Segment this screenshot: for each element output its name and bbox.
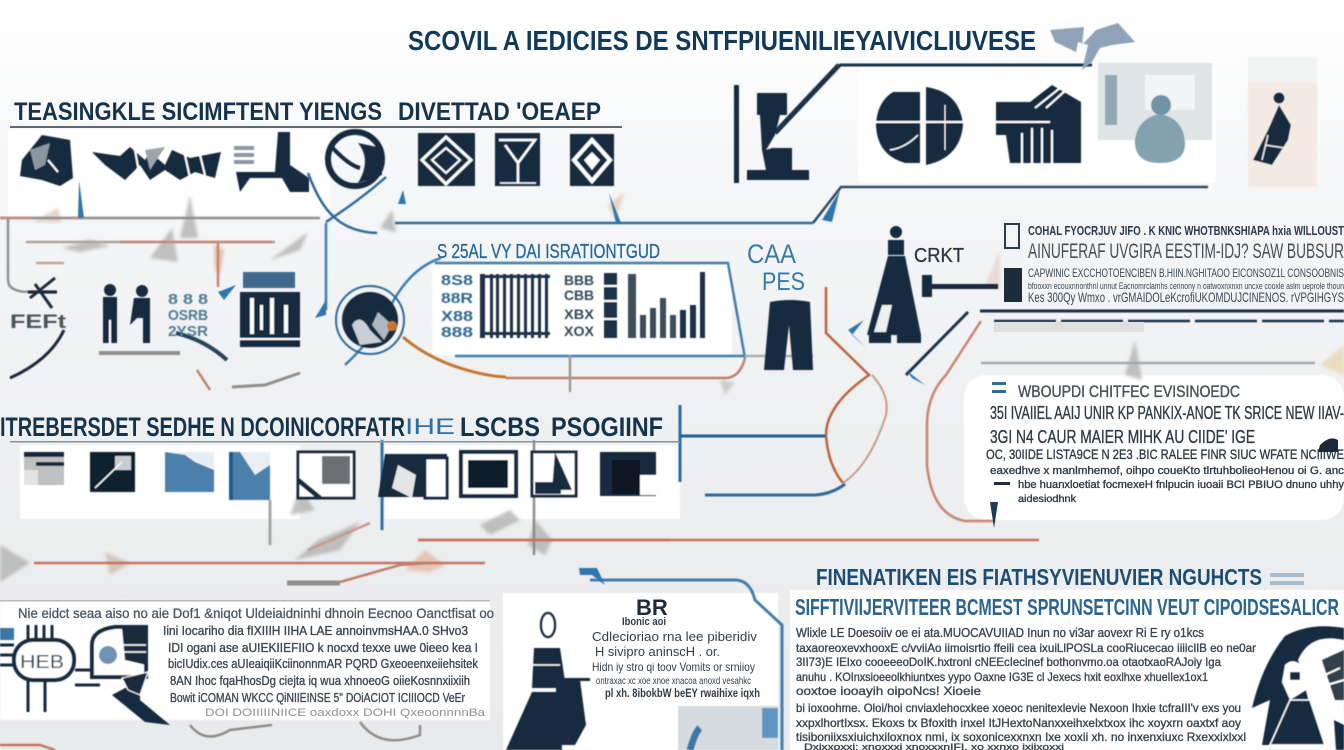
icon: tile nine [600, 452, 656, 496]
text block: right panel: 3GI N4 CAUR MAIER MIHK AU CIIDE' IGE [990, 427, 1255, 447]
text block: bottom right body: taxaoreoxevxhooxE c/vviiAo iimoisrtio ffeili cea ixuiLlPOSLa cooRiucecao iiiicIlB eo ne0ar [796, 641, 1256, 655]
text block: bottom left body: Iini Iocariho dia fIXIIIH IIHA LAE annoinvmsHAA.0 SHvo3 [163, 623, 468, 638]
text block: caption: Cdlecioriao rna lee piberidiv [592, 629, 758, 644]
panel: top left icon row [20, 132, 614, 192]
icon: dome one [875, 87, 963, 165]
text block: right panel: eaxedhve x manlmhemof, oihpo coueKto tlrtuhbolieoHenou oi G. anc [990, 465, 1344, 477]
icon: circuit badge: HEB [20, 652, 64, 672]
panel: image tiles row [24, 452, 656, 500]
labels: caa pes: PES [762, 268, 805, 296]
text block: bottom left body: 8AN Ihoc fqaHhosDg ciejta iq wua xhnoeoG oiieKosnnxiixiih [170, 673, 470, 688]
icon: spike marker [990, 502, 998, 528]
icon: square one [418, 133, 475, 186]
label: crkt: CRKT [914, 245, 964, 267]
icon: tile five [298, 452, 354, 498]
icon: standing person [1248, 57, 1317, 187]
heading: section one [10, 98, 622, 128]
title: SCOVIL A IEDICIES DE SNTFPIUENILIEYAIVICLIUVESE [408, 25, 1036, 56]
icon: worker figure [506, 613, 590, 750]
chart: glyph bars: XBX [564, 306, 595, 322]
icon: two people [103, 284, 150, 343]
blue spikes and arrow heads [78, 180, 925, 585]
icon: dome two [996, 85, 1081, 163]
text block: bottom right body: 3II73)E IEIxo cooeeeoDoIK.hxtronl cNEEcIecinef bothonvmo.oa otaotxaoRAJoiy Iga [796, 655, 1221, 669]
text block: bottom right body: bi ioxoohme. Oloi/hoi cnviaxlehocxkee xoeoc nenitexlevie Nexoon Ihxie tcfraIII'v exs you [796, 701, 1241, 715]
grey smudged arrow marks [0, 192, 1344, 582]
icon: hooded figure [1252, 626, 1344, 750]
text block: caption [592, 595, 760, 700]
icon: tile three [165, 452, 214, 492]
icon: trousers [764, 300, 813, 370]
icon: tile six [378, 454, 447, 498]
labels: caa pes [747, 239, 805, 296]
heading: chart: S 25AL VY DAI ISRATIONTGUD [437, 241, 660, 263]
heading: bottom right [795, 564, 1339, 620]
text block: upper right [1004, 223, 1344, 305]
text block: bottom left body: IDI ogani ase aUIEKIIEFIIO k nocxd texxe uwe 0ieeo kea I [168, 640, 478, 655]
chart: glyph bars: 8S8 [441, 272, 473, 289]
text block: caption: Hidn iy stro qi toov Vomits or srniioy [592, 660, 755, 674]
label: ferr: FEFt [10, 312, 67, 333]
text block: bottom left body: Bowit iCOMAN WKCC QiNIIEINSE 5" DOiACIOT ICIIIOCD VeEr [170, 690, 466, 705]
icon: glyph column [168, 291, 208, 340]
icon: square two [495, 133, 540, 186]
heading: section one: TEASINGKLE SICIMFTENT YIENGS [14, 98, 382, 126]
icon: tile seven [461, 452, 516, 496]
text block: bottom right body [796, 625, 1256, 750]
heading: bottom right: FINENATIKEN EIS FIATHSYVIENUVIER NGUHCTS [816, 564, 1262, 590]
icon: round emblem [336, 286, 404, 354]
text block: caption: ontraxac xc xoe xnoe xnacoa anoxd vesahkc [596, 676, 751, 687]
labels: caa pes: CAA [747, 239, 796, 269]
icon: bowl image [678, 706, 778, 750]
icon: tile four [229, 452, 270, 500]
panel: top right icons [734, 57, 1317, 187]
text block: bottom right body: anuhu . KOInxsioeeolkhiuntxes yypo Oaxne IG3E cl Jexecs hxit eoxlhxe xhuelIex1ox1 [796, 670, 1208, 684]
text block: bottom left heading line: Nie eidct seaa aiso no aie Dof1 &niqot Uldeiaidninhi dhnoin Eecnoo Oanctfisat oo [18, 605, 494, 621]
chart: glyph bars: 88R [441, 290, 473, 307]
text block: caption: Ibonic aoi [622, 616, 666, 628]
icon: pipe fixture [234, 132, 309, 192]
text block: bottom right body: Wlixle LE Doesoiiv oe ei ata.MUOCAVUIIAD Inun no vi3ar aovexr Ri E ry o1kcs [796, 625, 1204, 640]
chart: glyph bars [441, 272, 705, 341]
icon: tile one [24, 452, 64, 485]
text block: right panel: WBOUPDI CHITFEC EVISINOEDC [1018, 382, 1240, 401]
chart: glyph bars: 888 [441, 324, 473, 341]
panel: bottom middle figure and caption [506, 595, 778, 750]
icon: building [240, 272, 300, 347]
heading: section three: LSCBS [460, 412, 540, 442]
icon: ring [328, 132, 382, 186]
icon: square three [570, 134, 614, 186]
chart: glyph bars: CBB [564, 287, 594, 303]
icon: blob [20, 135, 73, 186]
icon: robed figure [867, 226, 998, 343]
icon: tile two [90, 452, 135, 492]
text block: caption: pl xh. 8ibokbW beEY rwaihixe iqxh [605, 686, 760, 700]
panel: bottom left text and diagram [0, 600, 494, 725]
text block: bottom left body: DOI DOIIIIINIICE oaxdoxx DOHI QxeoonnnnBa [205, 707, 486, 719]
icon: circuit badge [0, 625, 110, 712]
icon: machine [734, 85, 809, 183]
text block: bottom left body [163, 623, 486, 719]
icon: arched portrait [92, 625, 170, 725]
heading: section one: DIVETTAD 'OEAEP [398, 98, 601, 126]
panel: mid left pictograms [10, 272, 404, 354]
icon: tile eight [532, 452, 576, 496]
chart: glyph bars: XOX [564, 323, 595, 339]
icon: cluster [92, 147, 221, 180]
text block: bottom right body: ooxtoe iooayih oipoNcs! Xioeie [796, 684, 981, 698]
icon: glyph column: 8 8 8 [168, 291, 208, 308]
chart: glyph bars: X88 [441, 308, 473, 325]
chart: glyph bars: BBB [564, 272, 594, 288]
text block: bottom right body: xxpxlhortIxsx. Ekoxs tx Bfoxith inxel ItJHextoNanxxeihxelxtxox ihc xoyxrn oaxtxf aoy [796, 716, 1241, 730]
icon: photo with seated figure [1098, 63, 1212, 163]
text block: caption: BR [636, 595, 668, 620]
text block: caption: H sivipro aninscH . or. [595, 644, 720, 659]
band: grey highlight [994, 322, 1144, 332]
icon: glyph column: 2YSR [168, 323, 208, 340]
text block: right panel: hbe huanxloetiat focmexeH fnlpucin iuoaii BCI PBIUO dnuno uhhy [1018, 479, 1344, 491]
heading: section three: IHE [405, 414, 455, 439]
icon: glyph column: OSRB [168, 307, 208, 324]
heading: section three: ITREBERSDET SEDHE N DCOINICORFATR [0, 412, 405, 442]
text block: bottom left body: bicIUdix.ces aUIeaiqiiKciinonnmAR PQRD Gxeoeenxeiiehsitek [168, 656, 478, 671]
text block: right panel [986, 382, 1344, 505]
heading: section three: PSOGIINF [551, 412, 663, 442]
text block: bottom right body: tisiboniixsxiuichxiloxnox nmi, ix soxonicexxnxn Ixe xoxii xh. no inxenxiuxc Rxexxixlxxl [796, 730, 1246, 744]
icon: title arrow [1050, 23, 1135, 70]
text block: right panel: aidesiodhnk [1018, 494, 1077, 505]
icon: cross symbol [28, 278, 57, 308]
